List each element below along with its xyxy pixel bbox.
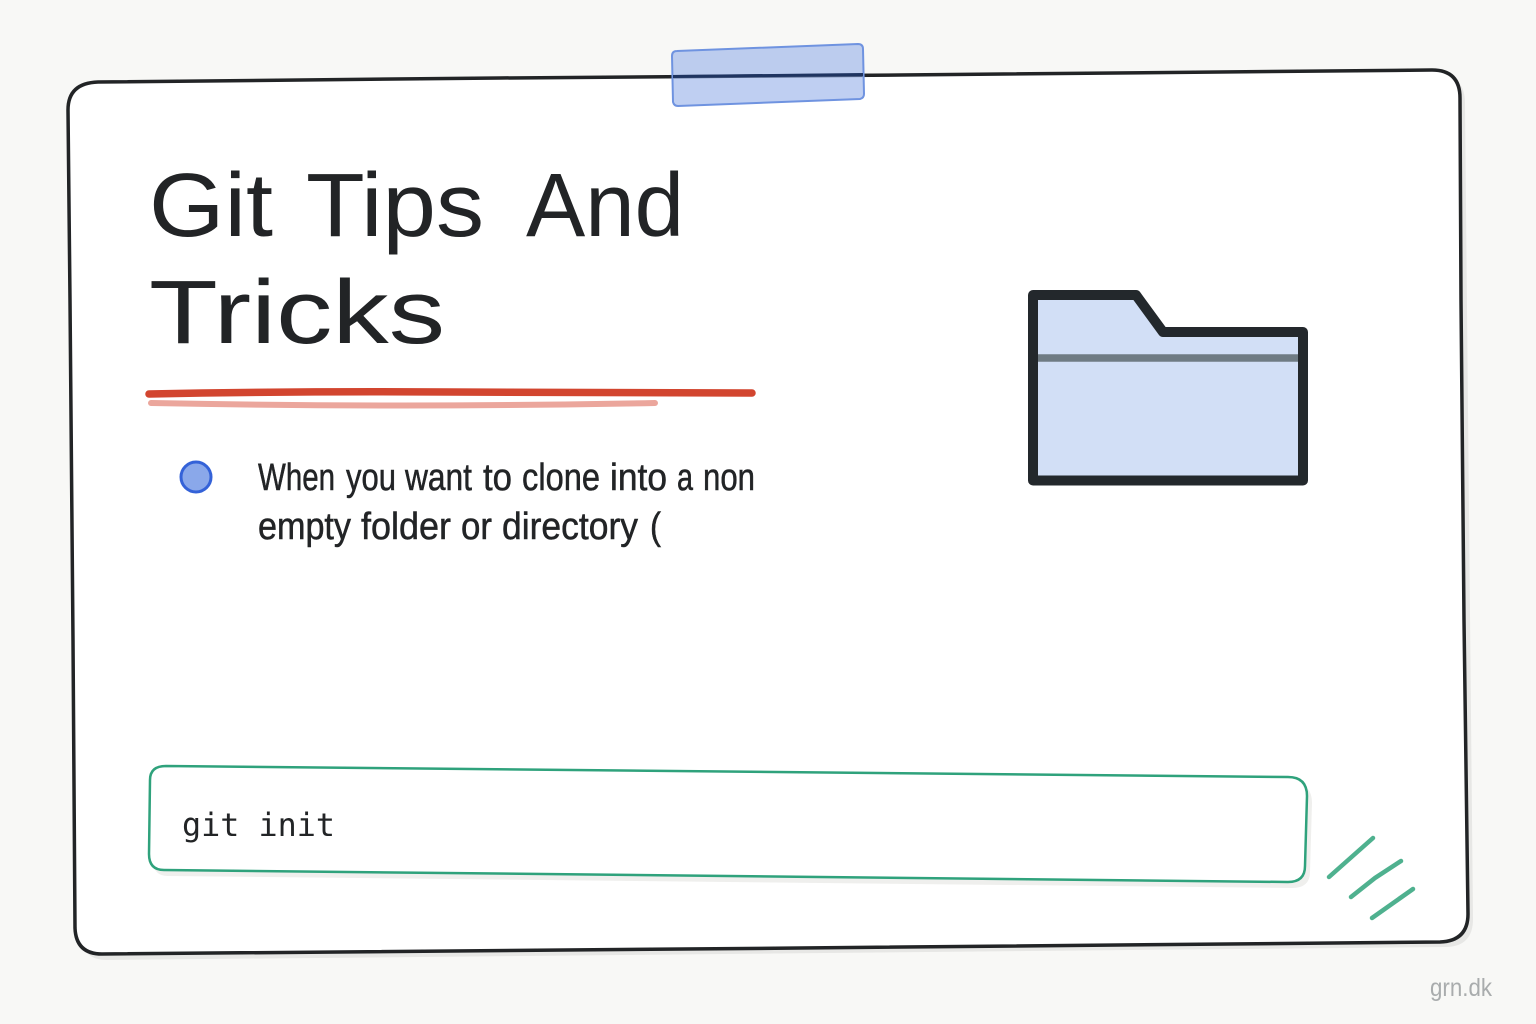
title: Tricks <box>149 263 445 363</box>
title: And <box>526 156 684 256</box>
title: Tips <box>306 156 484 256</box>
watermark: grn.dk <box>1430 974 1492 1002</box>
bullet text: into <box>610 457 667 499</box>
bullet text: a <box>677 457 694 499</box>
title: Git <box>149 156 273 256</box>
bullet text: or <box>461 506 492 548</box>
bullet text: clone <box>522 457 600 499</box>
code box <box>149 766 1312 888</box>
bullet text: When <box>258 457 335 499</box>
title <box>149 156 684 363</box>
bullet text: folder <box>361 506 451 548</box>
bullet text: to <box>483 457 512 499</box>
card panel <box>68 70 1473 960</box>
code text: git init <box>182 806 335 844</box>
bullet dot <box>181 462 211 492</box>
tape <box>672 44 864 106</box>
bullet text: ( <box>650 506 661 548</box>
bullet text: empty <box>258 506 351 548</box>
icon: folder <box>1033 295 1303 480</box>
bullet text: non <box>703 457 755 499</box>
bullet text: you <box>346 457 396 499</box>
title underline <box>149 392 752 406</box>
accent marks <box>1329 838 1413 918</box>
bullet text <box>258 457 755 548</box>
bullet text: directory <box>502 506 638 548</box>
bullet text: want <box>404 457 472 499</box>
